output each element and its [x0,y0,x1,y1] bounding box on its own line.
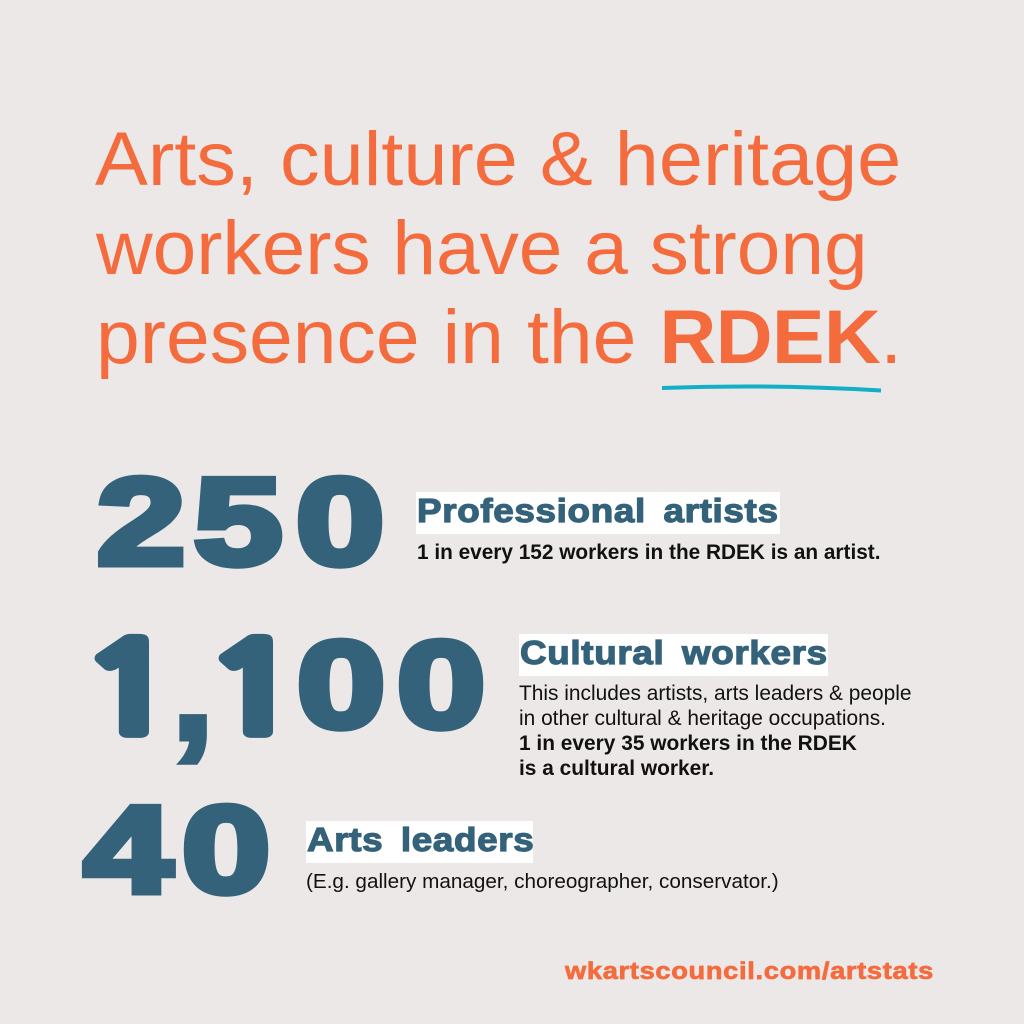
stat: 1,100 [78,603,485,771]
stat: 1,100: 1 [202,628,305,752]
text: cultural workers description: is a cultural worker. [519,757,714,780]
text: artists description: 1 in every 152 workers in the RDEK is an artist. [417,541,881,564]
text: cultural workers description: in other cultural & heritage occupations. [519,707,886,730]
stat: 40: 0 [182,782,270,918]
stat: 40: 4 [84,782,172,918]
stat: 250: 5 [194,454,282,591]
text: cultural workers description: This includes artists, arts leaders & people [519,682,911,705]
label: Professional artists: Professional artists [417,492,779,529]
stat: 250: 0 [296,454,384,591]
stat: 1,100: 1 [78,628,181,752]
text: cultural workers description [519,682,911,780]
text: arts leaders description: (E.g. gallery manager, choreographer, conservator.) [306,870,779,893]
stat: 1,100: , [171,603,215,771]
title: presence in the RDEK. [96,295,902,380]
title: Arts, culture & heritage [95,117,901,202]
stat: 40 [82,782,270,918]
title: workers have a strong [96,206,868,291]
label: Cultural workers: Cultural workers [520,634,828,671]
label: Arts leaders: Arts leaders [307,821,533,858]
website link: wkartscouncil.com/artstats [565,958,934,985]
stat: 1,100: 0 [397,617,485,754]
underline accent [662,384,882,392]
stat: 250: 2 [97,454,185,591]
stat: 250 [97,454,384,591]
text: cultural workers description: 1 in every 35 workers in the RDEK [519,732,857,755]
title [95,117,902,380]
stat: 1,100: 0 [297,617,385,754]
